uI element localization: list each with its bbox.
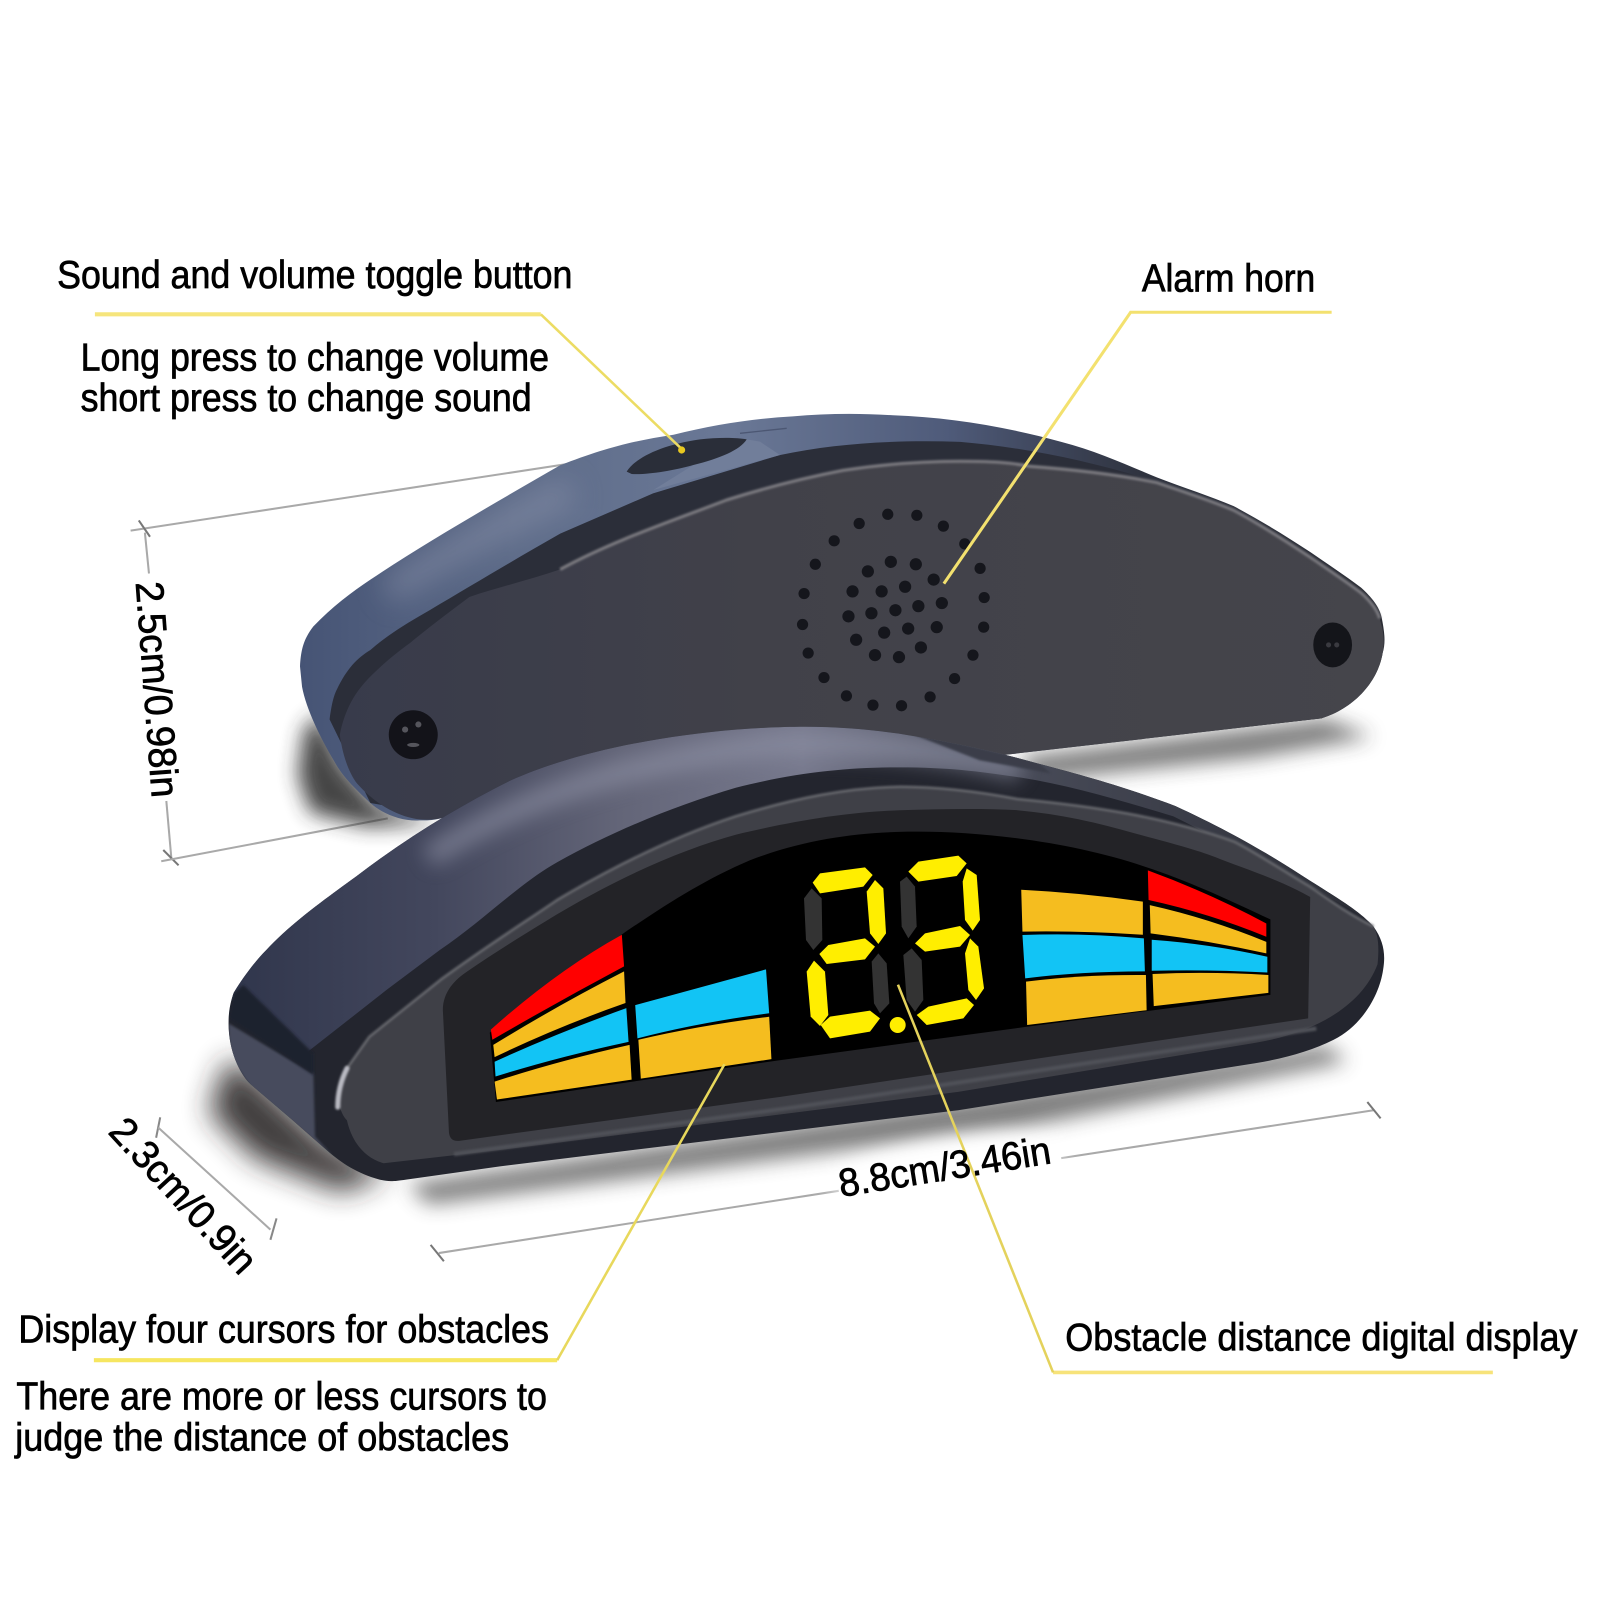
label: width dimension: 8.8cm/3.46in bbox=[835, 1128, 1054, 1206]
left distance bars bbox=[491, 935, 771, 1099]
rear face ridge bbox=[560, 461, 1380, 618]
label: alarm horn: Alarm horn bbox=[1142, 256, 1315, 300]
front body shell bbox=[229, 727, 1384, 1181]
right distance bars bbox=[1021, 870, 1268, 1025]
text: cursor explanation bbox=[14, 1375, 547, 1460]
black screen bbox=[490, 832, 1270, 1102]
label: depth dimension: 2.3cm/0.9in bbox=[101, 1109, 266, 1283]
leader: digital display bbox=[898, 985, 1493, 1372]
halo behind width label bbox=[827, 1124, 1067, 1213]
rear device bbox=[300, 414, 1385, 821]
label: display four cursors: Display four cursors for obstacles bbox=[18, 1307, 549, 1351]
dimension line: depth bbox=[156, 1117, 277, 1240]
front face ridge bbox=[347, 787, 1373, 1068]
leader: cursors bbox=[94, 1064, 724, 1360]
active segments bbox=[807, 856, 984, 1038]
end cap lower shade bbox=[228, 985, 333, 1157]
leader: alarm horn bbox=[944, 312, 1332, 584]
display bezel bbox=[443, 809, 1310, 1141]
rear body shell bbox=[300, 414, 1385, 821]
label: sound and volume toggle button: Sound and volume toggle button bbox=[57, 253, 572, 297]
face lower ridge bbox=[454, 1029, 1316, 1154]
inactive segments bbox=[804, 877, 923, 1013]
screw right bbox=[1313, 622, 1352, 667]
dimension line: width bbox=[431, 1102, 1381, 1261]
corner highlight bbox=[338, 1068, 347, 1107]
front upper band bbox=[204, 714, 1429, 1157]
text: long and short press: Long press to change volume bbox=[81, 335, 549, 379]
text: long and short press bbox=[81, 335, 549, 420]
speaker grille holes bbox=[797, 509, 990, 711]
digital readout 2.3 bbox=[804, 856, 984, 1038]
front face plate bbox=[339, 787, 1378, 1163]
rear band highlight bbox=[388, 490, 571, 592]
infographic canvas bbox=[14, 259, 1578, 1459]
text: cursor explanation: judge the distance of obstacles bbox=[14, 1416, 509, 1460]
leader: sound button bbox=[95, 314, 685, 454]
text: cursor explanation: There are more or less cursors to bbox=[16, 1375, 547, 1419]
screw left bbox=[389, 710, 438, 759]
front device bbox=[204, 714, 1429, 1181]
button recess bbox=[627, 428, 787, 490]
label: height dimension: 2.5cm/0.98in bbox=[127, 580, 187, 799]
text: long and short press: short press to change sound bbox=[81, 376, 532, 420]
rear face plate bbox=[340, 461, 1384, 820]
device shadows bbox=[209, 714, 1372, 1204]
rear dark groove bbox=[330, 441, 1383, 816]
dimension line: height bbox=[131, 457, 612, 865]
